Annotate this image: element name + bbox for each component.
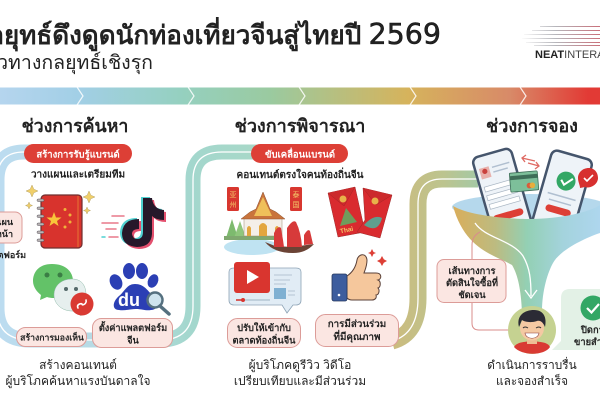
badge: brand awareness <box>24 144 132 163</box>
box: create visibility: สร้างการมองเห็น <box>20 330 84 342</box>
icon: Thai temple and Chinese junk boat: 亚 <box>230 190 236 200</box>
box: quality engagement: การมีส่วนร่วม <box>328 318 386 330</box>
box: clear decision path: ชัดเจน <box>458 290 486 300</box>
icon: booking funnel <box>453 205 600 312</box>
box: create visibility <box>16 328 86 346</box>
text: search stage summary <box>6 358 150 389</box>
badge: brand awareness: สร้างการรับรู้แบรนด์ <box>36 148 120 162</box>
icon: smiling customer <box>508 306 556 354</box>
logo: Neat Interactive <box>522 26 600 61</box>
icon: thumbs up with sparkles <box>332 249 387 301</box>
icon: notebook with China flag <box>37 195 82 248</box>
text: content for local Chinese: คอนเทนต์ตรงใจคนท้องถิ่นจีน <box>237 167 364 181</box>
icon: exchange arrows <box>522 155 539 169</box>
icon: Thai temple and Chinese junk boat: 国 <box>292 200 300 210</box>
text: booking stage summary: และจองสำเร็จ <box>496 373 568 388</box>
icon: Thai temple and Chinese junk boat: 泰 <box>292 190 300 200</box>
icon: TikTok logo <box>102 197 166 249</box>
icon: Baidu paw logo with magnifier: du <box>118 290 140 310</box>
box: quality engagement: ที่มีคุณภาพ <box>334 329 380 343</box>
text: search stage summary: ผู้บริโภคค้นหาแรงบันดาลใจ <box>6 374 150 389</box>
icon: red envelopes <box>328 187 392 238</box>
icon: Thai temple and Chinese junk boat <box>224 187 314 255</box>
heading: search stage: ช่วงการค้นหา <box>22 116 128 136</box>
badge: drive the brand: ขับเคลื่อนแบรนด์ <box>265 146 335 160</box>
box: plan ahead (cropped) <box>0 212 22 243</box>
heading: consideration stage: ช่วงการพิจารณา <box>235 116 365 136</box>
text: consideration stage summary: เปรียบเทียบและมีส่วนร่วม <box>234 374 366 388</box>
icon: Baidu paw logo with magnifier <box>107 263 169 314</box>
callout: successful sale (cropped) <box>552 289 600 350</box>
icon: Thai temple and Chinese junk boat: 州 <box>230 200 236 210</box>
box: quality engagement <box>316 314 398 346</box>
icon: credit card <box>509 171 539 192</box>
box: adapt to local Chinese market <box>228 318 300 348</box>
box: adapt to local Chinese market: ตลาดท้องถิ่นจีน <box>232 334 296 346</box>
box: set up China platforms: จีน <box>127 334 140 346</box>
text: search stage summary: สร้างคอนเทนต์ <box>39 358 117 372</box>
text: consideration stage summary <box>234 358 366 388</box>
icon: phone with booking form <box>472 147 534 240</box>
box: clear decision path: ตัดสินใจซื้อที่ <box>446 275 498 288</box>
callout connector lines <box>472 232 510 330</box>
icon: red envelopes: Thai <box>339 226 354 235</box>
flow ribbon: consideration to booking <box>392 179 478 341</box>
text: booking stage summary <box>487 357 577 388</box>
text: consideration stage summary: ผู้บริโภคดูรีวิว วิดีโอ <box>249 358 351 373</box>
heading: booking stage: ช่วงการจอง <box>486 116 578 136</box>
icon: video player card <box>229 262 301 313</box>
icon: phone with confirmation check <box>529 149 593 242</box>
text: booking stage summary: ดำเนินการราบรื่น <box>487 357 577 372</box>
text: plan and prepare team: วางแผนและเตรียมทีม <box>31 168 125 180</box>
journey gradient banner with chevrons <box>0 87 600 105</box>
box: clear decision path <box>437 260 506 302</box>
icon: WeChat logo with mini program <box>33 264 94 316</box>
icon: red confirmation bubble <box>578 168 598 188</box>
icon: sparkles <box>26 185 95 214</box>
flow ribbon: search to consideration <box>0 152 258 340</box>
badge: drive the brand <box>251 144 348 163</box>
box: set up China platforms <box>92 318 172 348</box>
box: set up China platforms: ตั้งค่าแพลตฟอร์ม <box>99 320 167 333</box>
box: clear decision path: เส้นทางการ <box>449 265 495 276</box>
icon: funnel inner opening <box>452 194 600 220</box>
box: adapt to local Chinese market: ปรับให้เข้ากับ <box>237 322 291 333</box>
